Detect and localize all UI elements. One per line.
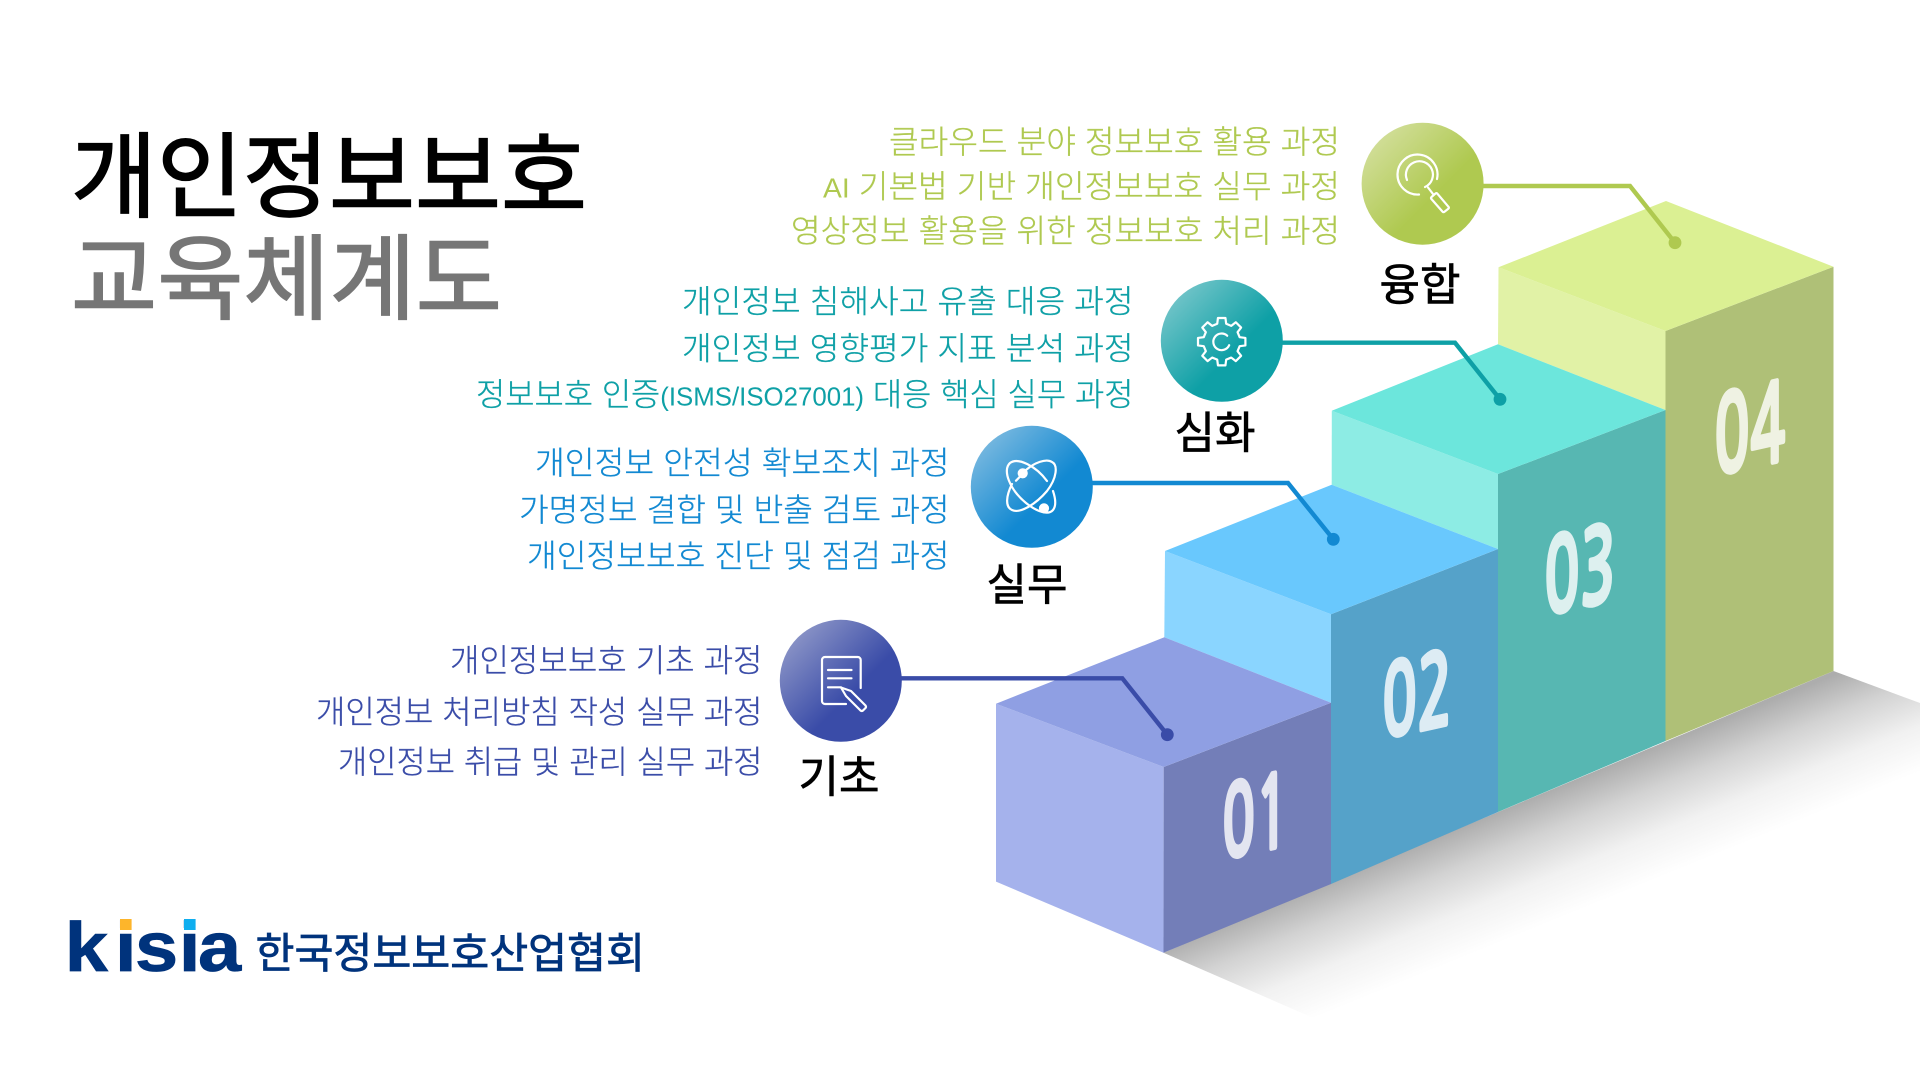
label: 기초: 기초 bbox=[799, 741, 879, 805]
course list: 기초: 개인정보보호 기초 과정 bbox=[450, 636, 762, 682]
course list: 심화: 정보보호 인증(ISMS/ISO27001) 대응 핵심 실무 과정 bbox=[476, 370, 1134, 416]
course list: 기초: 개인정보 처리방침 작성 실무 과정 bbox=[316, 687, 762, 733]
connector: 융합 bbox=[1482, 186, 1681, 249]
course list: 실무: 가명정보 결합 및 반출 검토 과정 bbox=[519, 485, 950, 531]
step number 02: 02 bbox=[1382, 641, 1452, 755]
course list: 심화: 개인정보 침해사고 유출 대응 과정 bbox=[682, 276, 1134, 322]
step 3 bbox=[1332, 344, 1666, 812]
connector: 실무 bbox=[1091, 483, 1340, 546]
badge: 융합 bbox=[1362, 123, 1484, 245]
floor shadow bbox=[1164, 671, 1920, 1034]
course list: 실무: 개인정보 안전성 확보조치 과정 bbox=[535, 438, 950, 484]
icon: document and pencil bbox=[822, 657, 866, 711]
title bbox=[71, 102, 587, 339]
title: 교육체계도 bbox=[71, 204, 502, 339]
badge: 기초 bbox=[780, 620, 902, 742]
staircase chart bbox=[996, 201, 1834, 953]
connector: 심화 bbox=[1281, 343, 1506, 406]
course list: 융합: AI 기본법 기반 개인정보보호 실무 과정 bbox=[823, 162, 1340, 208]
course list: 실무: 개인정보보호 진단 및 점검 과정 bbox=[527, 531, 950, 577]
step number 03: 03 bbox=[1544, 512, 1616, 632]
step number 01: 01 bbox=[1222, 762, 1289, 876]
label: 심화: 심화 bbox=[1175, 397, 1255, 461]
step number 04: 04 bbox=[1714, 370, 1786, 493]
course list: 융합: 클라우드 분야 정보보호 활용 과정 bbox=[889, 117, 1340, 163]
course list: 실무 bbox=[519, 438, 950, 577]
organisation name: 한국정보보호산업협회 bbox=[256, 920, 645, 981]
course list: 융합 bbox=[791, 117, 1340, 252]
course list: 심화: 개인정보 영향평가 지표 분석 과정 bbox=[682, 324, 1134, 370]
step 2 bbox=[1164, 485, 1498, 884]
connector: 기초 bbox=[900, 678, 1174, 741]
step 4 bbox=[1498, 201, 1834, 741]
logo wordmark: kisia bbox=[65, 908, 242, 986]
step 1 bbox=[996, 637, 1331, 953]
icon: atom bbox=[1007, 461, 1056, 513]
course list: 융합: 영상정보 활용을 위한 정보보호 처리 과정 bbox=[791, 206, 1340, 252]
course list: 기초 bbox=[316, 636, 762, 783]
icon: gear bbox=[1198, 318, 1245, 365]
label: 실무: 실무 bbox=[987, 549, 1067, 613]
logo bbox=[65, 908, 645, 986]
icon: magnifier bbox=[1398, 155, 1449, 212]
label: 융합: 융합 bbox=[1380, 249, 1460, 313]
course list: 기초: 개인정보 취급 및 관리 실무 과정 bbox=[338, 737, 762, 783]
badge: 실무 bbox=[971, 426, 1093, 548]
badge: 심화 bbox=[1161, 280, 1283, 402]
logo dots bbox=[120, 919, 196, 930]
title: 개인정보보호 bbox=[71, 102, 587, 237]
course list: 심화 bbox=[476, 276, 1134, 416]
